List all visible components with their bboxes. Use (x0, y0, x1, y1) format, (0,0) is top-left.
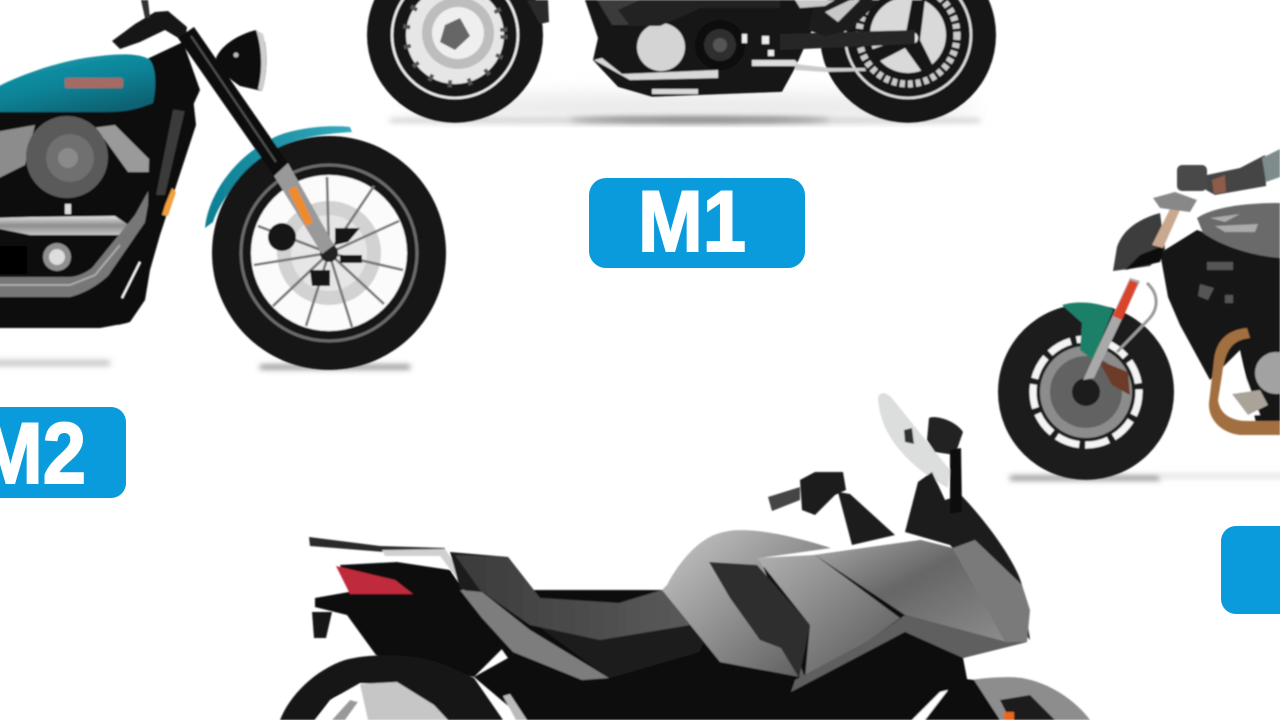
motorcycle: naked bike (998, 149, 1280, 480)
dark nose and chin (791, 632, 963, 720)
side panel (460, 590, 609, 680)
seat (450, 552, 704, 678)
mirror stem (141, 0, 150, 18)
fork (1083, 278, 1156, 380)
front wheel (212, 136, 446, 370)
silver panel (757, 555, 900, 678)
front fork gap (912, 690, 948, 720)
motorcycle: gray sport tourer (280, 393, 1090, 720)
wheel (998, 304, 1174, 480)
fender (1062, 302, 1113, 360)
rear fender (280, 655, 503, 720)
motorcycle: teal cruiser (0, 0, 446, 370)
windscreen (878, 393, 950, 488)
badge: M1 (589, 174, 805, 270)
rear silver panel (360, 682, 448, 720)
front fender (958, 677, 1090, 720)
front wheel (820, 0, 996, 123)
engine and frame (585, 0, 915, 97)
main fairing (815, 540, 1006, 642)
lower body (460, 540, 1027, 720)
upper fairing (905, 472, 1030, 640)
rear wheel glimpse (315, 690, 362, 720)
tail section (315, 562, 503, 677)
handlebar and rider arm (1153, 149, 1280, 212)
handlebar (112, 11, 187, 49)
front fender (205, 126, 352, 228)
fuel tank (662, 530, 831, 678)
lower fairing (791, 615, 1027, 692)
tail light (336, 566, 413, 594)
fuel tank (0, 54, 155, 112)
frame and engine (1113, 203, 1280, 435)
headlight (216, 30, 266, 91)
rear wheel (367, 0, 549, 123)
license plate bracket (312, 612, 332, 638)
mirror (927, 417, 963, 514)
fork (178, 27, 334, 254)
engine and frame (0, 42, 200, 328)
badge: M1: M1 (638, 174, 746, 270)
motorcycle: top cruiser (367, 0, 996, 123)
rear rack (309, 537, 465, 582)
badge: partial right (1221, 526, 1280, 614)
handlebar (768, 472, 895, 545)
chrome strut (503, 694, 527, 720)
